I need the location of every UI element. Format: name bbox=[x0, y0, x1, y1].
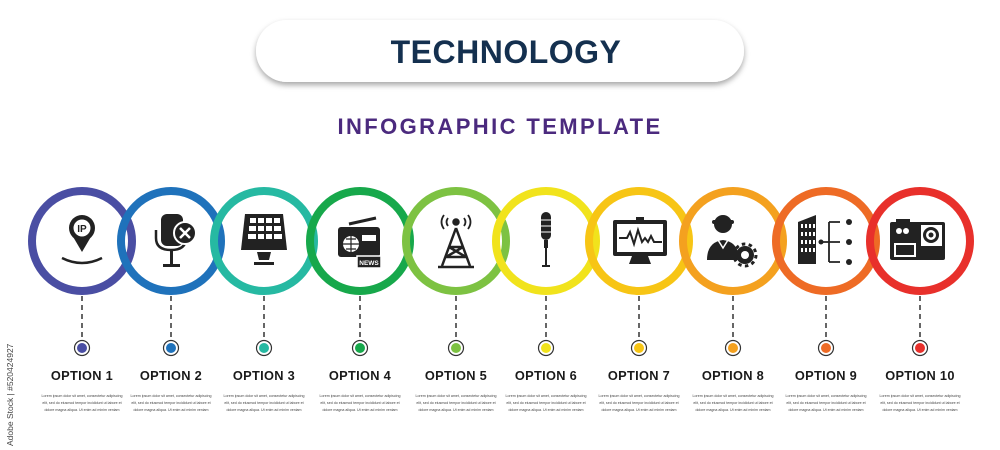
option descriptions: dolore magna aliqua. Ut enim ad minim veniam bbox=[418, 408, 494, 412]
option descriptions: dolore magna aliqua. Ut enim ad minim veniam bbox=[226, 408, 302, 412]
option descriptions: dolore magna aliqua. Ut enim ad minim veniam bbox=[133, 408, 209, 412]
option labels: OPTION 2 bbox=[140, 368, 202, 383]
option descriptions: elit, sed do eiusmod tempor incididunt ut labore et bbox=[42, 401, 122, 405]
icon: building hierarchy bbox=[798, 215, 852, 265]
icon: IP location pin bbox=[62, 215, 102, 263]
option labels bbox=[51, 368, 955, 383]
option labels: OPTION 8 bbox=[702, 368, 764, 383]
circle 1 bbox=[32, 191, 132, 291]
icon: monitor heartbeat bbox=[613, 217, 667, 264]
option descriptions: elit, sed do eiusmod tempor incididunt ut labore et bbox=[506, 401, 586, 405]
option descriptions: dolore magna aliqua. Ut enim ad minim veniam bbox=[788, 408, 864, 412]
option descriptions: Lorem ipsum dolor sit amet, consectetur adipiscing bbox=[416, 394, 496, 398]
option descriptions: elit, sed do eiusmod tempor incididunt ut labore et bbox=[693, 401, 773, 405]
circle 5 bbox=[406, 191, 506, 291]
icon: engineer with gear bbox=[707, 215, 756, 266]
option labels: OPTION 10 bbox=[885, 368, 955, 383]
option labels: OPTION 6 bbox=[515, 368, 577, 383]
option descriptions: Lorem ipsum dolor sit amet, consectetur adipiscing bbox=[506, 394, 586, 398]
option labels: OPTION 9 bbox=[795, 368, 857, 383]
option descriptions: Lorem ipsum dolor sit amet, consectetur adipiscing bbox=[693, 394, 773, 398]
subtitle: INFOGRAPHIC TEMPLATE bbox=[337, 114, 663, 139]
option labels: OPTION 4 bbox=[329, 368, 392, 383]
circle 6 bbox=[496, 191, 596, 291]
option labels: OPTION 1 bbox=[51, 368, 113, 383]
option descriptions: elit, sed do eiusmod tempor incididunt ut labore et bbox=[880, 401, 960, 405]
option descriptions: Lorem ipsum dolor sit amet, consectetur adipiscing bbox=[320, 394, 400, 398]
option descriptions: elit, sed do eiusmod tempor incididunt ut labore et bbox=[416, 401, 496, 405]
option descriptions: dolore magna aliqua. Ut enim ad minim veniam bbox=[601, 408, 677, 412]
option descriptions bbox=[42, 394, 960, 412]
circle 8 bbox=[683, 191, 783, 291]
circle 7 bbox=[589, 191, 689, 291]
icon: news radio bbox=[338, 218, 381, 268]
option descriptions: dolore magna aliqua. Ut enim ad minim veniam bbox=[882, 408, 958, 412]
option labels: OPTION 7 bbox=[608, 368, 670, 383]
circle 4 bbox=[310, 191, 410, 291]
icon: mute microphone bbox=[156, 214, 196, 267]
circle 9 bbox=[776, 191, 876, 291]
option descriptions: Lorem ipsum dolor sit amet, consectetur adipiscing bbox=[224, 394, 304, 398]
option descriptions: elit, sed do eiusmod tempor incididunt ut labore et bbox=[786, 401, 866, 405]
circle 2 bbox=[121, 191, 221, 291]
connectors and dots bbox=[82, 296, 920, 337]
option descriptions: dolore magna aliqua. Ut enim ad minim veniam bbox=[44, 408, 120, 412]
option descriptions: Lorem ipsum dolor sit amet, consectetur adipiscing bbox=[42, 394, 122, 398]
icon: solar panel bbox=[241, 214, 287, 265]
option descriptions: dolore magna aliqua. Ut enim ad minim veniam bbox=[695, 408, 771, 412]
title pill bbox=[256, 20, 744, 82]
option descriptions: elit, sed do eiusmod tempor incididunt ut labore et bbox=[224, 401, 304, 405]
option descriptions: Lorem ipsum dolor sit amet, consectetur adipiscing bbox=[880, 394, 960, 398]
option descriptions: Lorem ipsum dolor sit amet, consectetur adipiscing bbox=[131, 394, 211, 398]
icon: news radio: NEWS bbox=[359, 260, 379, 267]
option dots bbox=[74, 340, 928, 356]
circles row bbox=[32, 191, 970, 291]
option descriptions: Lorem ipsum dolor sit amet, consectetur adipiscing bbox=[599, 394, 679, 398]
option descriptions: elit, sed do eiusmod tempor incididunt ut labore et bbox=[320, 401, 400, 405]
stock watermark text: Adobe Stock | #520424927 bbox=[5, 343, 15, 446]
title: TECHNOLOGY bbox=[391, 34, 621, 70]
option labels: OPTION 3 bbox=[233, 368, 295, 383]
icon: signal tower bbox=[438, 215, 474, 267]
option descriptions: dolore magna aliqua. Ut enim ad minim veniam bbox=[508, 408, 584, 412]
icon: microphone stand bbox=[541, 212, 551, 267]
circle 10 bbox=[870, 191, 970, 291]
option descriptions: elit, sed do eiusmod tempor incididunt ut labore et bbox=[131, 401, 211, 405]
option labels: OPTION 5 bbox=[425, 368, 487, 383]
option descriptions: dolore magna aliqua. Ut enim ad minim veniam bbox=[322, 408, 398, 412]
circle 3 bbox=[214, 191, 314, 291]
option descriptions: elit, sed do eiusmod tempor incididunt ut labore et bbox=[599, 401, 679, 405]
option descriptions: Lorem ipsum dolor sit amet, consectetur adipiscing bbox=[786, 394, 866, 398]
icon: action camera bbox=[890, 219, 945, 260]
icon: IP location pin: IP bbox=[77, 224, 87, 235]
